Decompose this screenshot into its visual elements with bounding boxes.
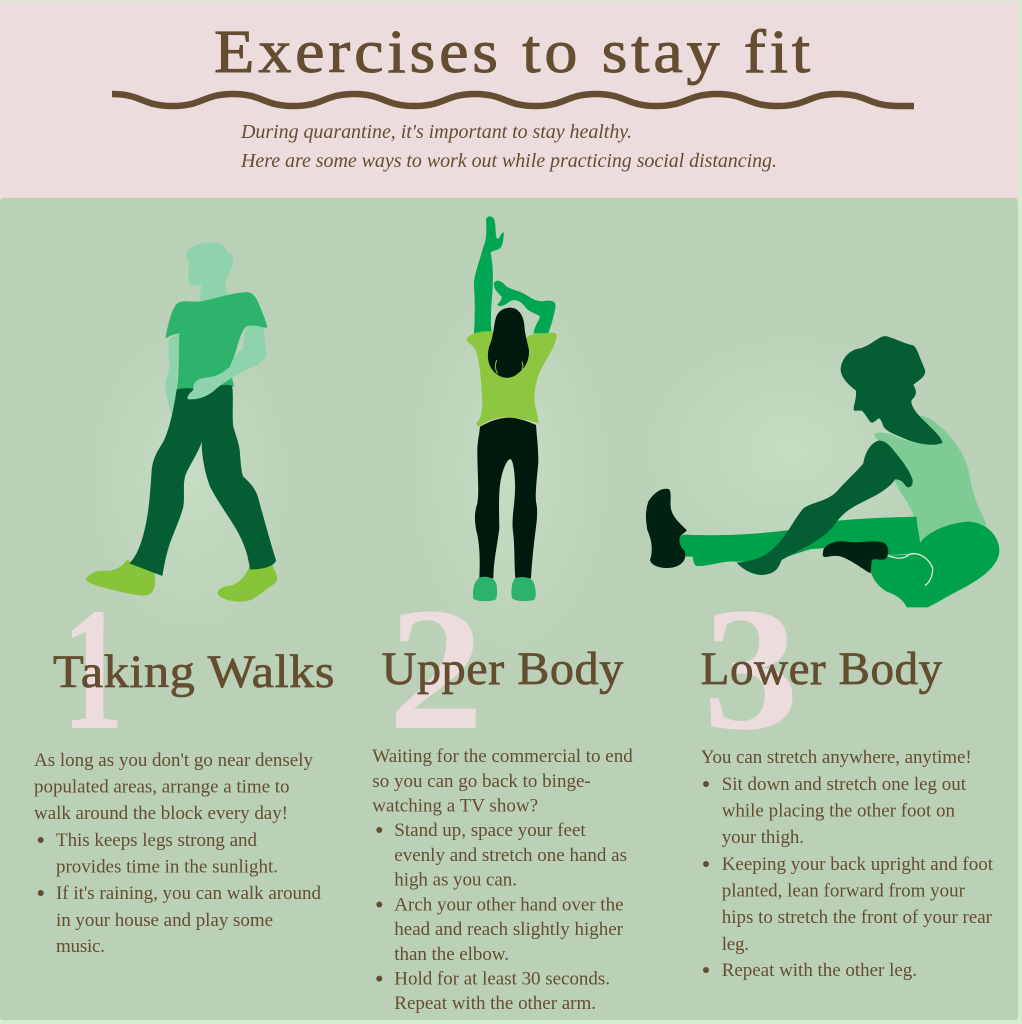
body text: taking walks: populated areas, arrange a time to (34, 777, 290, 798)
body text: upper body: Arch your other hand over the (394, 894, 624, 916)
body text: upper body: head and reach slightly higher (394, 919, 624, 940)
body text: upper body: high as you can. (394, 870, 517, 891)
body text: lower body: You can stretch anywhere, anytime! (701, 747, 972, 768)
illustration: man walking (86, 242, 277, 602)
illustration: woman stretching arms (467, 216, 557, 601)
wavy divider (112, 94, 914, 106)
panel: header (0, 1, 1018, 198)
body text: lower body (701, 747, 994, 981)
body text: lower body: while placing the other foot on (722, 801, 956, 822)
number 2: 2 (388, 572, 484, 767)
subtitle: Here are some ways to work out while practicing social distancing. (240, 150, 777, 172)
number 3: 3 (703, 572, 799, 767)
illustration: person seated stretching leg (646, 336, 999, 607)
body text: upper body: evenly and stretch one hand as (394, 845, 627, 866)
body text: taking walks (34, 750, 322, 957)
panel: content background (0, 198, 1018, 1020)
subtitle (240, 121, 777, 172)
heading: taking walks: Taking Walks (53, 646, 335, 698)
body text: taking walks: music. (56, 936, 105, 957)
body text: lower body: Repeat with the other leg. (722, 960, 917, 981)
title: Exercises to stay fit (214, 19, 814, 86)
body text: taking walks: If it's raining, you can walk around (56, 883, 322, 904)
body text: upper body: than the elbow. (394, 944, 509, 965)
body text: taking walks: in your house and play some (56, 910, 273, 931)
body text: taking walks: provides time in the sunlight. (56, 857, 278, 878)
number 1: 1 (62, 572, 124, 767)
column 2: upper body (372, 572, 633, 1014)
body text: upper body: Repeat with the other arm. (394, 993, 596, 1014)
body text: lower body: Sit down and stretch one leg out (722, 774, 967, 795)
subtitle: During quarantine, it's important to stay healthy. (240, 121, 632, 143)
column 3: lower body (701, 572, 994, 981)
body text: lower body: your thigh. (722, 827, 804, 848)
heading: lower body: Lower Body (701, 643, 943, 695)
body text: upper body (372, 746, 633, 1014)
body text: taking walks: walk around the block every day! (34, 803, 288, 824)
body text: upper body: so you can go back to binge- (372, 771, 591, 792)
body text: taking walks: As long as you don't go near densely (34, 750, 314, 771)
body text: lower body: hips to stretch the front of your rear (722, 907, 993, 928)
body text: lower body: planted, lean forward from your (722, 881, 966, 902)
body text: upper body: Hold for at least 30 seconds. (394, 969, 610, 990)
body text: lower body: leg. (722, 934, 749, 955)
heading: upper body: Upper Body (382, 643, 624, 695)
body text: upper body: watching a TV show? (372, 796, 538, 817)
column 1: taking walks (34, 572, 335, 957)
body text: lower body: Keeping your back upright and foot (722, 854, 994, 875)
body text: upper body: Stand up, space your feet (394, 820, 586, 841)
body text: upper body: Waiting for the commercial to end (372, 746, 633, 767)
body text: taking walks: This keeps legs strong and (56, 830, 258, 851)
